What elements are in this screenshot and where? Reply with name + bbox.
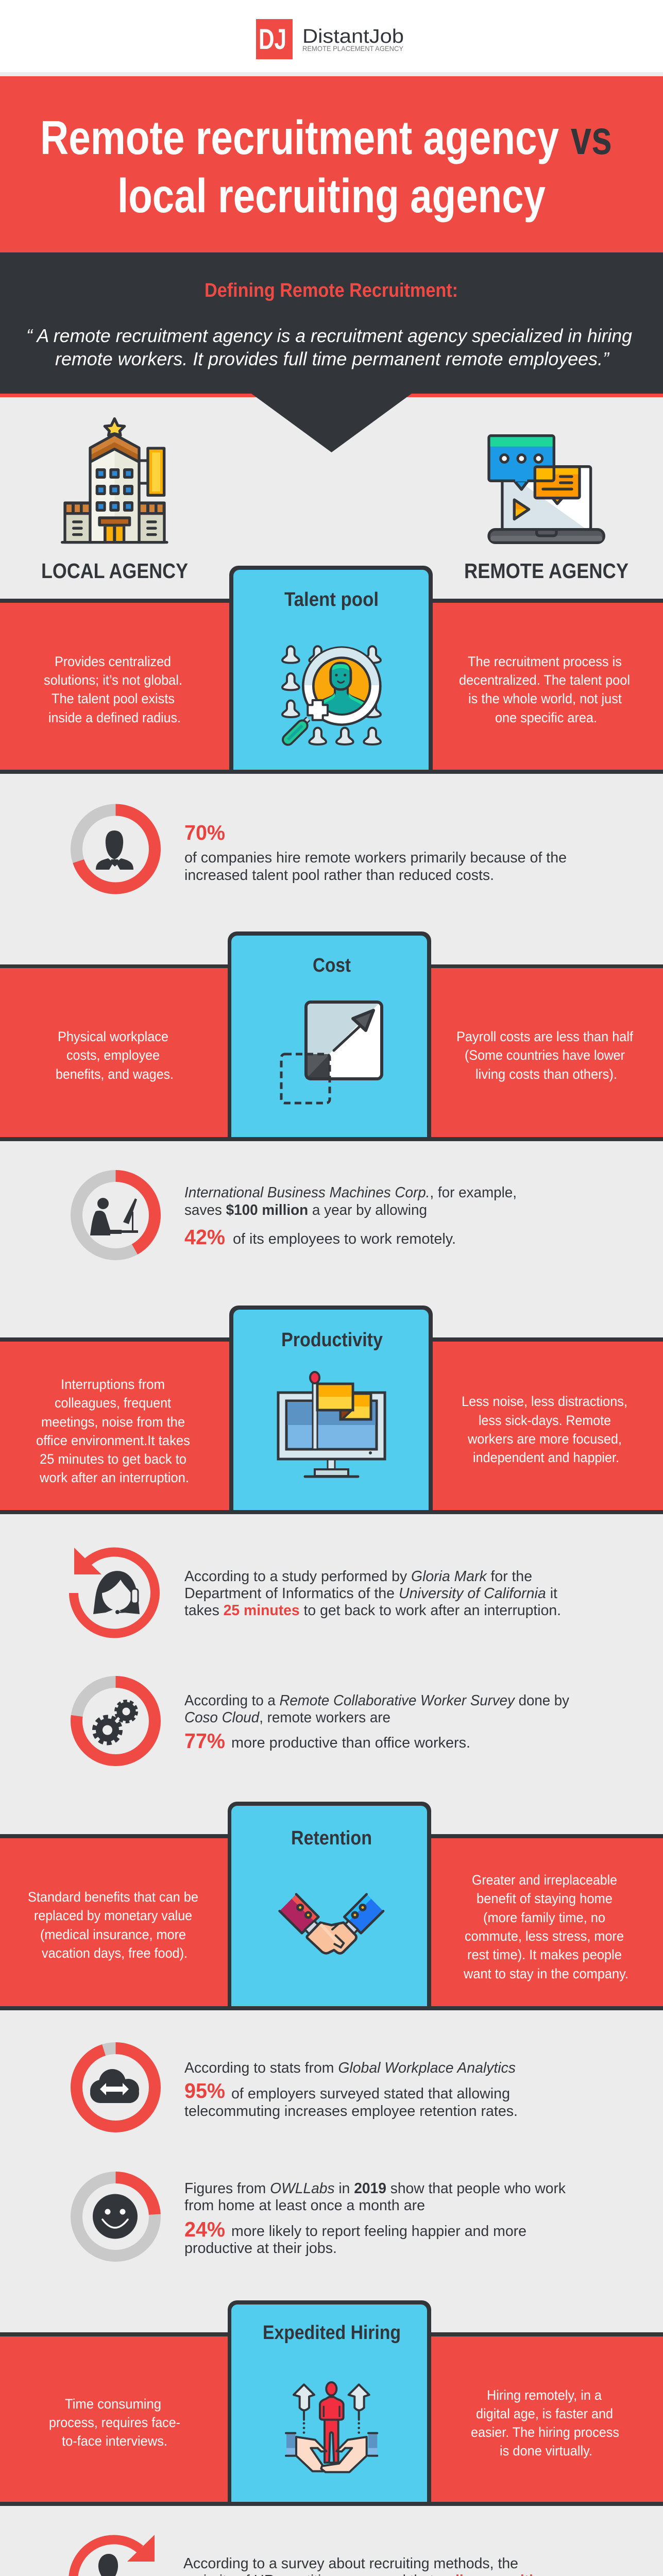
- stat: 70%: increased talent pool rather than reduced costs.: [184, 867, 494, 884]
- text: remote retention: rest time). It makes people: [467, 1947, 622, 1962]
- text: local productivity: work after an interruption.: [39, 1470, 189, 1485]
- panel: talent pool: [0, 566, 663, 774]
- stat: 70%: [76, 810, 567, 888]
- stat: 95%: According to stats from Global Workplace Analytics: [184, 2060, 516, 2076]
- heading: talent pool: Talent pool: [284, 589, 379, 611]
- title band: Remote recruitment agency: [40, 111, 559, 164]
- icon: cloud with arrows: [90, 2069, 139, 2103]
- title band: [0, 76, 663, 252]
- icon: hands lifting person: [286, 2382, 377, 2472]
- stat: 25 minutes: [74, 1548, 561, 1633]
- label: local agency: LOCAL AGENCY: [41, 559, 188, 583]
- stat: 24%: 24%: [184, 2217, 225, 2241]
- text: local productivity: meetings, noise from the: [41, 1414, 185, 1430]
- panel: expedited hiring: [0, 2300, 663, 2506]
- definition band: “ A remote recruitment agency is a recruitment agency specialized in hiring: [26, 325, 632, 346]
- icon: smiley: [93, 2194, 138, 2239]
- text: remote retention: benefit of staying home: [477, 1891, 613, 1906]
- chart: donut 42%: [76, 1176, 155, 1254]
- text: local cost: benefits, and wages.: [56, 1066, 174, 1082]
- chart: donut 77%: [76, 1682, 155, 1760]
- logo: DistantJob: REMOTE PLACEMENT AGENCY: [302, 44, 404, 53]
- text: remote talent pool: is the whole world, not just: [468, 691, 622, 706]
- text: remote retention: [463, 1872, 628, 1981]
- text: local productivity: office environment.It takes: [36, 1433, 190, 1448]
- text: remote hiring: Hiring remotely, in a: [487, 2387, 602, 2403]
- text: local retention: Standard benefits that can be: [28, 1889, 198, 1905]
- text: local hiring: process, requires face-: [49, 2415, 180, 2430]
- text: local hiring: to-face interviews.: [62, 2433, 167, 2449]
- stat: 25 minutes: takes 25 minutes to get back to work after an interruption.: [184, 1602, 561, 1619]
- text: remote talent pool: The recruitment process is: [468, 654, 622, 669]
- stat: 42%: of its employees to work remotely.: [233, 1231, 456, 1247]
- title band: local recruiting agency: [117, 169, 546, 223]
- stat: 77%: According to a Remote Collaborative Worker Survey done by: [184, 1692, 569, 1709]
- icon: remote agency laptop with chat bubbles: [489, 436, 604, 543]
- text: remote hiring: easier. The hiring process: [471, 2425, 619, 2440]
- text: local cost: costs, employee: [66, 1047, 160, 1063]
- logo: DistantJob: DistantJob: [302, 26, 404, 47]
- icon: return arrow with headset agent: [74, 1548, 155, 1633]
- text: local productivity: Interruptions from: [61, 1377, 165, 1392]
- icon: person in suit: [96, 831, 133, 870]
- icon: magnifier over people: [282, 646, 381, 744]
- stat: online recruiting: [73, 2535, 551, 2576]
- definition band: remote workers. It provides full time permanent remote employees.”: [55, 348, 610, 369]
- icon: scale up square: [281, 1002, 382, 1103]
- chart: donut 70%: [76, 810, 155, 888]
- icon: local agency building: [62, 419, 167, 543]
- stat: 25 minutes: Department of Informatics of the University of California it: [184, 1585, 557, 1602]
- definition band: Defining Remote Recruitment:: [205, 280, 458, 301]
- text: remote hiring: digital age, is faster and: [476, 2406, 613, 2421]
- panel: productivity: [0, 1306, 663, 1514]
- stat: 95%: [76, 2048, 518, 2127]
- logo: DistantJob: DJ: [259, 23, 286, 55]
- text: remote retention: want to stay in the company.: [463, 1966, 628, 1981]
- text: local retention: [28, 1889, 198, 1961]
- text: remote productivity: less sick-days. Remote: [479, 1413, 611, 1428]
- chart: donut 24%: [76, 2177, 155, 2256]
- stat: 24%: from home at least once a month are: [184, 2197, 425, 2214]
- stat: 42%: 42%: [184, 1225, 225, 1249]
- text: remote cost: (Some countries have lower: [465, 1047, 625, 1063]
- stat: 95%: telecommuting increases employee retention rates.: [184, 2103, 518, 2120]
- stat: 42%: International Business Machines Corp., for example,: [184, 1184, 517, 1201]
- text: remote productivity: independent and happier.: [473, 1450, 619, 1465]
- heading: retention: Retention: [291, 1827, 372, 1849]
- stat: 24%: Figures from OWLLabs in 2019 show that people who work: [184, 2180, 566, 2197]
- text: remote cost: Payroll costs are less than half: [456, 1029, 633, 1044]
- text: remote retention: (more family time, no: [483, 1910, 605, 1925]
- text: local retention: replaced by monetary value: [34, 1908, 192, 1923]
- definition band: [0, 252, 663, 452]
- logo: DistantJob: [256, 19, 404, 59]
- panel: retention: [0, 1802, 663, 2010]
- icon: monitor with flags: [278, 1372, 385, 1477]
- stat: 77%: Coso Cloud, remote workers are: [184, 1709, 390, 1726]
- text: remote productivity: Less noise, less distractions,: [462, 1394, 627, 1409]
- heading: expedited hiring: Expedited Hiring: [263, 2322, 401, 2344]
- text: remote hiring: [471, 2387, 619, 2459]
- stat: 77%: [76, 1682, 569, 1760]
- title band: vs: [571, 111, 612, 164]
- text: local productivity: colleagues, frequent: [55, 1395, 171, 1411]
- text: local talent pool: inside a defined radius.: [48, 710, 181, 725]
- text: local talent pool: The talent pool exists: [52, 691, 175, 706]
- text: local cost: [56, 1029, 174, 1082]
- text: local hiring: [49, 2396, 180, 2449]
- text: remote talent pool: [459, 654, 630, 725]
- text: remote hiring: is done virtually.: [500, 2443, 592, 2459]
- text: local productivity: 25 minutes to get back to: [40, 1451, 186, 1467]
- stat: 24%: productive at their jobs.: [184, 2240, 337, 2257]
- text: remote talent pool: decentralized. The talent pool: [459, 672, 630, 688]
- heading: productivity: Productivity: [281, 1329, 383, 1351]
- text: remote retention: Greater and irreplaceable: [472, 1872, 617, 1888]
- icon: handshake: [280, 1894, 383, 1953]
- text: local talent pool: [44, 654, 182, 725]
- heading: cost: Cost: [313, 955, 351, 976]
- icon: cycle arrow with user search: [73, 2535, 155, 2576]
- icon: gears: [95, 1702, 136, 1743]
- stat: 42%: [76, 1176, 517, 1254]
- panel: cost: [0, 931, 663, 1141]
- text: local hiring: Time consuming: [65, 2396, 161, 2412]
- stat: 77%: more productive than office workers.: [231, 1735, 470, 1751]
- text: local cost: Physical workplace: [58, 1029, 168, 1044]
- stat: 24%: more likely to report feeling happier and more: [231, 2223, 526, 2240]
- stat: 95%: 95%: [184, 2079, 225, 2103]
- stat: 24%: [76, 2177, 566, 2257]
- text: remote cost: living costs than others).: [475, 1066, 617, 1082]
- text: local retention: (medical insurance, more: [40, 1927, 186, 1942]
- text: local retention: vacation days, free food).: [42, 1945, 188, 1961]
- text: remote retention: commute, less stress, more: [465, 1928, 624, 1944]
- stat: 42%: saves $100 million a year by allowing: [184, 1202, 427, 1218]
- header with logo: [0, 0, 663, 72]
- text: remote productivity: [462, 1394, 627, 1465]
- text: local talent pool: Provides centralized: [55, 654, 171, 669]
- text: remote cost: [456, 1029, 633, 1082]
- stat: 70%: of companies hire remote workers primarily because of the: [184, 850, 567, 866]
- text: remote talent pool: one specific area.: [495, 710, 597, 725]
- label: remote agency: REMOTE AGENCY: [464, 559, 628, 583]
- chart: donut 95%: [76, 2048, 155, 2127]
- stat: 70%: 70%: [184, 821, 225, 844]
- stat: online recruiting: According to a survey about recruiting methods, the: [183, 2555, 518, 2572]
- stat: 95%: of employers surveyed stated that allowing: [231, 2086, 510, 2102]
- icon: person at computer: [90, 1198, 138, 1235]
- stat: 77%: 77%: [184, 1729, 225, 1753]
- stat: 25 minutes: According to a study performed by Gloria Mark for the: [184, 1568, 532, 1585]
- text: remote productivity: workers are more focused,: [467, 1431, 622, 1447]
- text: local talent pool: solutions; it’s not global.: [44, 672, 182, 688]
- text: local productivity: [36, 1377, 190, 1485]
